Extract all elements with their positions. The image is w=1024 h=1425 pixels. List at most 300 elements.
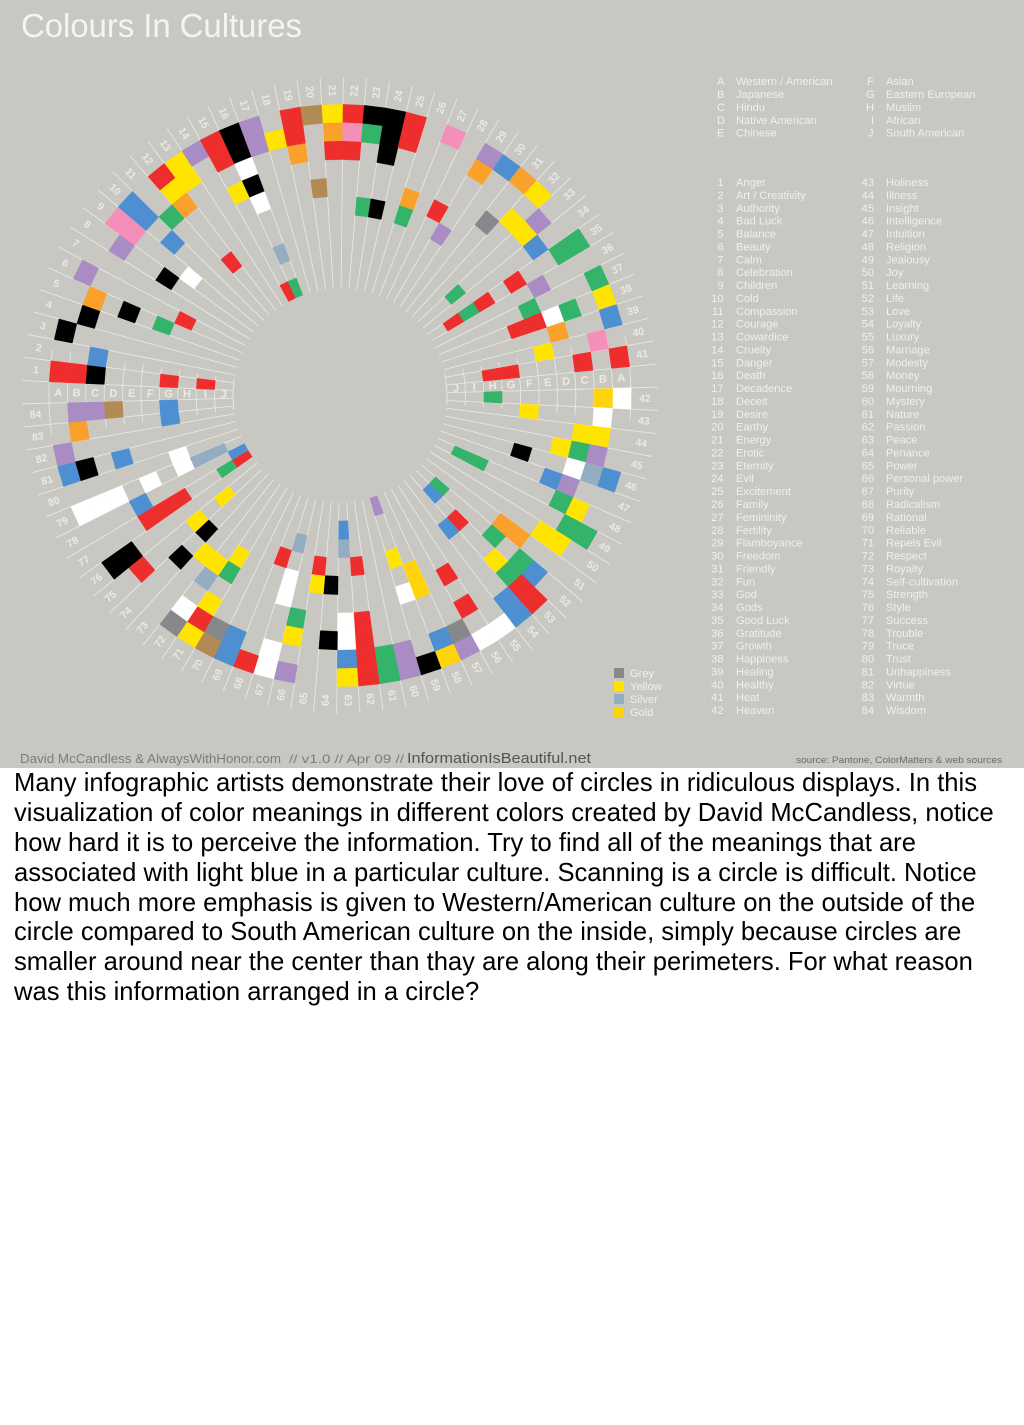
legend: culture letters right: Muslim (886, 102, 921, 114)
list: meaning numbers 1 to 42: 1 (717, 177, 724, 189)
list: meaning numbers 43 to 84: 80 (862, 654, 874, 666)
list: meaning names 43 to 84 (886, 177, 963, 717)
row number labels around the wheel: 8 (81, 218, 93, 231)
list: meaning names 1 to 42 (736, 177, 806, 717)
list: meaning numbers 1 to 42: 12 (711, 319, 724, 331)
column header: right letters A to J: B (599, 373, 607, 386)
list: meaning names 43 to 84: Reliable (886, 525, 926, 537)
row number labels around the wheel: 33 (561, 186, 578, 203)
legend: culture letters left: Hindu (736, 102, 765, 114)
list: meaning names 1 to 42: Heaven (736, 705, 774, 717)
list: meaning names 1 to 42: Celebration (736, 267, 793, 279)
legend: culture letters left: Japanese (736, 89, 784, 101)
list: meaning numbers 1 to 42: 10 (711, 293, 724, 305)
row 5 blocks (83, 286, 176, 338)
list: meaning numbers 1 to 42: 23 (711, 460, 724, 472)
footer credits (20, 751, 591, 767)
column header: right letters A to J: A (617, 372, 626, 385)
column header: right letters A to J: I (472, 382, 476, 394)
row 84 blocks (67, 396, 179, 423)
list: meaning names 1 to 42: Cruelty (736, 344, 772, 356)
list: meaning names 43 to 84: Power (886, 460, 918, 472)
list: meaning names 1 to 42: Earthy (736, 422, 769, 434)
list: meaning names 43 to 84: Unhappiness (886, 666, 951, 678)
row 77 blocks (137, 446, 255, 531)
row number labels around the wheel: 45 (630, 458, 644, 472)
row number labels around the wheel: 25 (413, 94, 428, 109)
legend: culture letters right: I (871, 115, 874, 127)
list: meaning numbers 43 to 84: 48 (862, 241, 874, 253)
list: meaning numbers 1 to 42: 31 (711, 563, 724, 575)
row number labels around the wheel: 63 (342, 694, 354, 707)
row 2 blocks (87, 347, 109, 368)
row 75 blocks (129, 483, 238, 583)
column header: left letters A to J: C (91, 387, 99, 400)
row 19 blocks (280, 107, 310, 165)
row number labels around the wheel: 24 (392, 89, 406, 103)
list: meaning numbers 1 to 42: 42 (711, 705, 724, 717)
list: meaning names 1 to 42: Flamboyance (736, 538, 803, 550)
list: meaning numbers 43 to 84: 81 (862, 666, 874, 678)
footer credits: David McCandless & AlwaysWithHonor.com (20, 752, 281, 766)
list: meaning names 43 to 84: Purity (886, 486, 915, 498)
row number labels around the wheel: 66 (275, 688, 289, 702)
legend: colour swatches: Yellow (630, 681, 663, 693)
legend: culture letters left (717, 76, 833, 140)
list: meaning names 43 to 84: Respect (886, 550, 927, 562)
column header: left letters A to J: B (73, 387, 81, 399)
row number labels around the wheel: 68 (231, 676, 246, 691)
list: meaning numbers 43 to 84: 45 (862, 203, 874, 215)
row number labels around the wheel (29, 85, 651, 707)
row number labels around the wheel: 16 (216, 106, 231, 121)
list: meaning names 43 to 84: Love (886, 306, 910, 318)
row 24 blocks (364, 108, 406, 220)
list: meaning names 43 to 84: Wisdom (886, 705, 926, 717)
row 43 blocks (519, 401, 612, 428)
body text: commentary (14, 769, 994, 1006)
row number labels around the wheel: 49 (596, 540, 612, 556)
list: meaning names 1 to 42: Danger (736, 357, 773, 369)
source note: source: Pantone, ColorMatters & web sources (796, 755, 1002, 766)
row 53 blocks (418, 479, 548, 614)
list: meaning names 1 to 42: Healthy (736, 679, 774, 691)
row number labels around the wheel: 58 (448, 670, 464, 685)
column header: left letters A to J: F (147, 388, 154, 400)
row 13 blocks (164, 151, 203, 193)
row number labels around the wheel: 36 (600, 241, 616, 257)
list: meaning numbers 43 to 84: 84 (862, 705, 874, 717)
row number labels around the wheel: 27 (455, 108, 470, 124)
list: meaning names 1 to 42: Decadence (736, 383, 792, 395)
row number labels around the wheel: 1 (33, 364, 40, 377)
legend: culture letters left: Western / American (736, 76, 833, 88)
row number labels around the wheel: 44 (635, 437, 648, 450)
body text: commentary: was this information arranged in a circle? (14, 978, 479, 1006)
row 64 blocks (319, 575, 341, 650)
row number labels around the wheel: 40 (631, 325, 646, 340)
list: meaning names 1 to 42: Healing (736, 666, 774, 678)
row number labels around the wheel: 39 (626, 304, 640, 318)
row 3 blocks (54, 319, 77, 344)
row 72 blocks (160, 550, 231, 637)
row number labels around the wheel: 10 (106, 181, 123, 198)
list: meaning names 1 to 42: Death (736, 370, 766, 382)
list: meaning names 43 to 84: Royalty (886, 563, 923, 575)
list: meaning names 43 to 84: Jealousy (886, 254, 930, 266)
row 20 blocks (301, 105, 331, 199)
row number labels around the wheel: 28 (475, 118, 491, 134)
legend: culture letters left: D (717, 115, 725, 127)
list: meaning numbers 1 to 42: 32 (711, 576, 724, 588)
row 55 blocks (488, 613, 516, 640)
list: meaning numbers 43 to 84: 58 (862, 370, 874, 382)
list: meaning numbers 1 to 42: 3 (717, 203, 724, 215)
list: meaning names 43 to 84: Mourning (886, 383, 932, 395)
row number labels around the wheel: 69 (210, 667, 226, 683)
legend: culture letters left: C (717, 102, 725, 114)
row 44 blocks (571, 422, 611, 448)
row 78 blocks (129, 439, 250, 516)
list: meaning numbers 1 to 42: 40 (711, 679, 724, 691)
row number labels around the wheel: 2 (35, 342, 43, 355)
row number labels around the wheel: 12 (139, 151, 156, 168)
row 52 blocks (426, 473, 548, 587)
legend: culture letters left: Chinese (736, 128, 777, 140)
list: meaning numbers 1 to 42: 39 (711, 666, 724, 678)
list: meaning names 43 to 84: Marriage (886, 344, 930, 356)
list: meaning numbers 1 to 42: 5 (717, 228, 724, 240)
list: meaning names 1 to 42: Growth (736, 641, 772, 653)
row number labels around the wheel: 30 (512, 141, 529, 158)
row 22 blocks (340, 104, 364, 160)
row number labels around the wheel: 77 (76, 553, 92, 570)
list: meaning numbers 43 to 84: 64 (862, 448, 874, 460)
row number labels around the wheel: 46 (624, 479, 639, 494)
legend: culture letters right: South American (886, 128, 964, 140)
row 21 blocks (322, 104, 345, 160)
row number labels around the wheel: 22 (348, 85, 361, 97)
body text: commentary: Many infographic artists demonstrate their love of circles in ridiculous displays. In this (14, 769, 977, 797)
list: meaning numbers 1 to 42: 6 (717, 241, 724, 253)
row number labels around the wheel: 59 (428, 678, 443, 693)
list: meaning numbers 1 to 42: 16 (711, 370, 724, 382)
legend: culture letters right: Eastern European (886, 89, 975, 101)
background panel (0, 0, 1024, 768)
legend: culture letters right: G (866, 89, 875, 101)
list: meaning numbers 1 to 42: 28 (711, 525, 724, 537)
list: meaning names 1 to 42: Fertility (736, 525, 772, 537)
row number labels around the wheel: 64 (320, 694, 332, 706)
column header: right letters A to J: J (453, 383, 459, 395)
row 67 blocks (253, 531, 312, 679)
row 30 blocks (492, 154, 520, 182)
row 45 blocks (549, 435, 608, 467)
row 81 blocks (58, 446, 134, 487)
list: meaning names 1 to 42: Calm (736, 254, 762, 266)
row 42 blocks (484, 386, 631, 409)
row number labels around the wheel: 43 (638, 415, 650, 428)
column header: left letters A to J: I (204, 389, 207, 401)
row 25 blocks (397, 112, 427, 153)
row 83 blocks (69, 408, 181, 442)
row 54 blocks (434, 515, 532, 628)
row 36 blocks (527, 275, 551, 299)
list: meaning numbers 1 to 42: 27 (711, 512, 724, 524)
list: meaning numbers 1 to 42: 19 (711, 409, 724, 421)
list: meaning names 43 to 84: Life (886, 293, 904, 305)
row number labels around the wheel: 62 (363, 693, 376, 706)
row number labels around the wheel: 83 (31, 430, 45, 444)
row 29 blocks (427, 143, 503, 248)
list: meaning names 43 to 84: Penance (886, 448, 930, 460)
row number labels around the wheel: 9 (94, 200, 106, 213)
row 76 blocks (101, 540, 144, 579)
column header: left letters A to J (54, 387, 227, 401)
legend: culture letters right: J (868, 128, 874, 140)
footer credits: InformationIsBeautiful.net (407, 751, 591, 767)
row 39 blocks (546, 304, 622, 345)
list: meaning names 1 to 42: God (736, 589, 757, 601)
row number labels around the wheel: 20 (303, 86, 316, 99)
list: meaning names 43 to 84: Trust (886, 654, 911, 666)
row 26 blocks (393, 188, 420, 228)
list: meaning numbers 1 to 42: 22 (711, 448, 724, 460)
row number labels around the wheel: 79 (55, 514, 71, 530)
row number labels around the wheel: 48 (607, 520, 623, 536)
column header: right letters A to J: G (506, 379, 516, 392)
row number labels around the wheel: 60 (407, 684, 421, 699)
row number labels around the wheel: 29 (494, 129, 510, 145)
row number labels around the wheel: 38 (619, 282, 634, 297)
list: meaning names 43 to 84: Success (886, 615, 928, 627)
row number labels around the wheel: 23 (370, 86, 384, 99)
row 1 blocks (49, 361, 216, 396)
list: meaning names 43 to 84: Holiness (886, 177, 929, 189)
list: meaning names 1 to 42: Compassion (736, 306, 798, 318)
row 65 blocks (309, 556, 328, 594)
column header: right letters A to J: E (544, 377, 552, 389)
row 40 blocks (533, 329, 609, 364)
list: meaning names 43 to 84: Trouble (886, 628, 923, 640)
row 14 blocks (182, 140, 210, 167)
list: meaning names 43 to 84: Luxury (886, 332, 920, 344)
list: meaning names 43 to 84: Joy (886, 267, 904, 279)
list: meaning numbers 1 to 42: 13 (711, 332, 724, 344)
list: meaning numbers 43 to 84: 53 (862, 306, 874, 318)
row 16 blocks (219, 122, 309, 301)
list: meaning names 1 to 42: Courage (736, 319, 779, 331)
row number labels around the wheel: 53 (541, 609, 558, 626)
legend: colour swatches: Silver (630, 694, 658, 706)
list: meaning names 1 to 42: Femininity (736, 512, 787, 524)
row number labels around the wheel: 65 (297, 692, 310, 705)
row number labels around the wheel: 7 (70, 237, 81, 250)
row number labels around the wheel: 37 (610, 261, 626, 277)
list: meaning names 43 to 84: Repels Evil (886, 538, 942, 550)
list: meaning numbers 43 to 84 (862, 177, 874, 717)
row number labels around the wheel: 71 (170, 646, 187, 662)
row 73 blocks (193, 542, 217, 566)
row 32 blocks (498, 181, 552, 235)
row number labels around the wheel: 41 (636, 348, 649, 361)
list: meaning numbers 43 to 84: 51 (862, 280, 874, 292)
row 11 blocks (159, 204, 185, 230)
row 56 blocks (433, 561, 498, 651)
legend: culture letters right: African (886, 115, 921, 127)
row 50 blocks (530, 519, 571, 557)
list: meaning numbers 1 to 42: 24 (711, 473, 724, 485)
list: meaning names 1 to 42: Cold (736, 293, 759, 305)
footer credits: // v1.0 // Apr 09 // (289, 752, 405, 766)
title: Colours In Cultures (21, 7, 302, 44)
row 6 blocks (73, 260, 198, 335)
row 66 blocks (274, 607, 309, 683)
list: meaning names 43 to 84: Passion (886, 422, 925, 434)
list: meaning numbers 43 to 84: 82 (862, 679, 874, 691)
row 18 blocks (264, 129, 288, 151)
list: meaning names 1 to 42: Heat (736, 692, 759, 704)
column header: left letters A to J: D (109, 388, 117, 400)
row number labels around the wheel: 5 (51, 277, 61, 291)
row number labels around the wheel: 61 (385, 689, 399, 703)
body text: commentary: associated with light blue in a particular culture. Scanning is a circle is difficult. Notice (14, 859, 977, 887)
legend: culture letters right (866, 76, 975, 140)
list: meaning numbers 1 to 42: 18 (711, 396, 724, 408)
list: meaning numbers 1 to 42: 30 (711, 550, 724, 562)
list: meaning numbers 1 to 42: 38 (711, 654, 724, 666)
list: meaning numbers 1 to 42: 17 (711, 383, 724, 395)
list: meaning names 1 to 42: Friendly (736, 563, 776, 575)
column header: right letters A to J: C (580, 374, 589, 387)
row number labels around the wheel: 6 (60, 257, 70, 270)
row 61 blocks (373, 644, 400, 684)
list: meaning names 43 to 84: Intelligence (886, 216, 942, 228)
list: meaning names 1 to 42: Good Luck (736, 615, 790, 627)
legend: culture letters right: H (866, 102, 874, 114)
list: meaning numbers 1 to 42: 26 (711, 499, 724, 511)
row number labels around the wheel: 75 (103, 588, 119, 605)
list: meaning numbers 43 to 84: 43 (862, 177, 874, 189)
list: meaning names 43 to 84: Nature (886, 409, 919, 421)
list: meaning numbers 1 to 42: 2 (717, 190, 724, 202)
list: meaning numbers 43 to 84: 52 (862, 293, 874, 305)
legend: colour swatches: Gold (630, 707, 653, 719)
list: meaning numbers 43 to 84: 56 (862, 344, 874, 356)
list: meaning names 1 to 42: Desire (736, 409, 768, 421)
column header: left letters A to J: J (221, 389, 227, 401)
list: meaning names 1 to 42: Family (736, 499, 769, 511)
list: meaning numbers 1 to 42: 21 (711, 435, 724, 447)
row 47 blocks (539, 467, 580, 497)
list: meaning numbers 1 to 42: 7 (717, 254, 724, 266)
list: meaning names 43 to 84: Modesty (886, 357, 928, 369)
row 23 blocks (351, 105, 385, 217)
list: meaning names 1 to 42: Erotic (736, 448, 765, 460)
list: meaning names 1 to 42: Authority (736, 203, 780, 215)
list: meaning names 43 to 84: Rational (886, 512, 927, 524)
legend: culture letters right: F (867, 76, 874, 88)
row 27 blocks (439, 125, 466, 150)
row number labels around the wheel: 78 (65, 534, 81, 550)
row 71 blocks (177, 543, 253, 648)
row 70 blocks (195, 615, 231, 658)
row 28 blocks (426, 200, 448, 223)
row 9 blocks (105, 207, 205, 292)
row number labels around the wheel: 50 (584, 558, 601, 575)
body text: commentary: visualization of color meanings in different colors created by David McCandless, notice (14, 799, 994, 827)
row number labels around the wheel: 84 (29, 409, 42, 421)
list: meaning numbers 43 to 84: 75 (862, 589, 874, 601)
list: meaning names 43 to 84: Mystery (886, 396, 925, 408)
list: meaning numbers 1 to 42: 34 (711, 602, 724, 614)
column header: right letters A to J: D (562, 376, 571, 388)
list: meaning names 43 to 84: Warmth (886, 692, 924, 704)
row 58 blocks (399, 558, 461, 669)
legend: culture letters left: E (717, 128, 724, 140)
list: meaning numbers 1 to 42 (711, 177, 724, 717)
body text: commentary: how hard it is to perceive the information. Try to find all of the meanings that are (14, 829, 916, 857)
column header: left letters A to J: E (128, 388, 136, 400)
row number labels around the wheel: 54 (524, 624, 541, 641)
row 15 blocks (200, 131, 302, 305)
legend: culture letters left: Native American (736, 115, 817, 127)
list: meaning names 1 to 42: Art / Creativity (736, 190, 806, 202)
list: meaning names 1 to 42: Beauty (736, 241, 771, 253)
row number labels around the wheel: 73 (134, 620, 151, 636)
row number labels around the wheel: 15 (195, 115, 211, 131)
column header: left letters A to J: G (164, 388, 173, 400)
row 82 blocks (53, 442, 76, 466)
row 35 blocks (440, 229, 590, 336)
list: meaning names 43 to 84: Radicalism (886, 499, 940, 511)
list: meaning numbers 1 to 42: 15 (711, 357, 724, 369)
list: meaning numbers 1 to 42: 33 (711, 589, 724, 601)
list: meaning names 1 to 42: Energy (736, 435, 772, 447)
list: meaning names 43 to 84: Personal power (886, 473, 963, 485)
list: meaning numbers 43 to 84: 83 (862, 692, 874, 704)
body text: commentary: smaller around near the center than thay are along their perimeters. For what reason (14, 948, 973, 976)
list: meaning numbers 43 to 84: 46 (862, 216, 874, 228)
list: meaning numbers 1 to 42: 9 (717, 280, 724, 292)
list: meaning names 1 to 42: Fun (736, 576, 755, 588)
list: meaning names 43 to 84: Strength (886, 589, 928, 601)
list: meaning numbers 43 to 84: 50 (862, 267, 874, 279)
row 12 blocks (148, 163, 246, 276)
row number labels around the wheel: 26 (434, 100, 449, 115)
list: meaning numbers 43 to 84: 61 (862, 409, 874, 421)
body text: commentary: how much more emphasis is given to Western/American culture on the outside of the (14, 888, 975, 916)
list: meaning numbers 1 to 42: 29 (711, 538, 724, 550)
list: meaning names 43 to 84: Virtue (886, 679, 915, 691)
list: meaning names 43 to 84: Money (886, 370, 920, 382)
row number labels around the wheel: 47 (616, 500, 631, 515)
row number labels around the wheel: 52 (556, 593, 573, 610)
infographic: Colours In Cultures (0, 0, 1024, 768)
row number labels around the wheel: 82 (35, 452, 49, 466)
row number labels around the wheel: 55 (506, 637, 523, 654)
column header: right letters A to J: F (526, 378, 533, 390)
list: meaning numbers 43 to 84: 71 (862, 538, 874, 550)
list: meaning numbers 43 to 84: 59 (862, 383, 874, 395)
row 31 blocks (473, 167, 537, 237)
list: meaning names 1 to 42: Freedom (736, 550, 780, 562)
list: meaning numbers 43 to 84: 44 (862, 190, 874, 202)
column header: left letters A to J: H (183, 388, 191, 401)
list: meaning numbers 1 to 42: 14 (711, 344, 724, 356)
column header: right letters A to J (453, 372, 626, 395)
list: meaning names 43 to 84: Truce (886, 641, 914, 653)
